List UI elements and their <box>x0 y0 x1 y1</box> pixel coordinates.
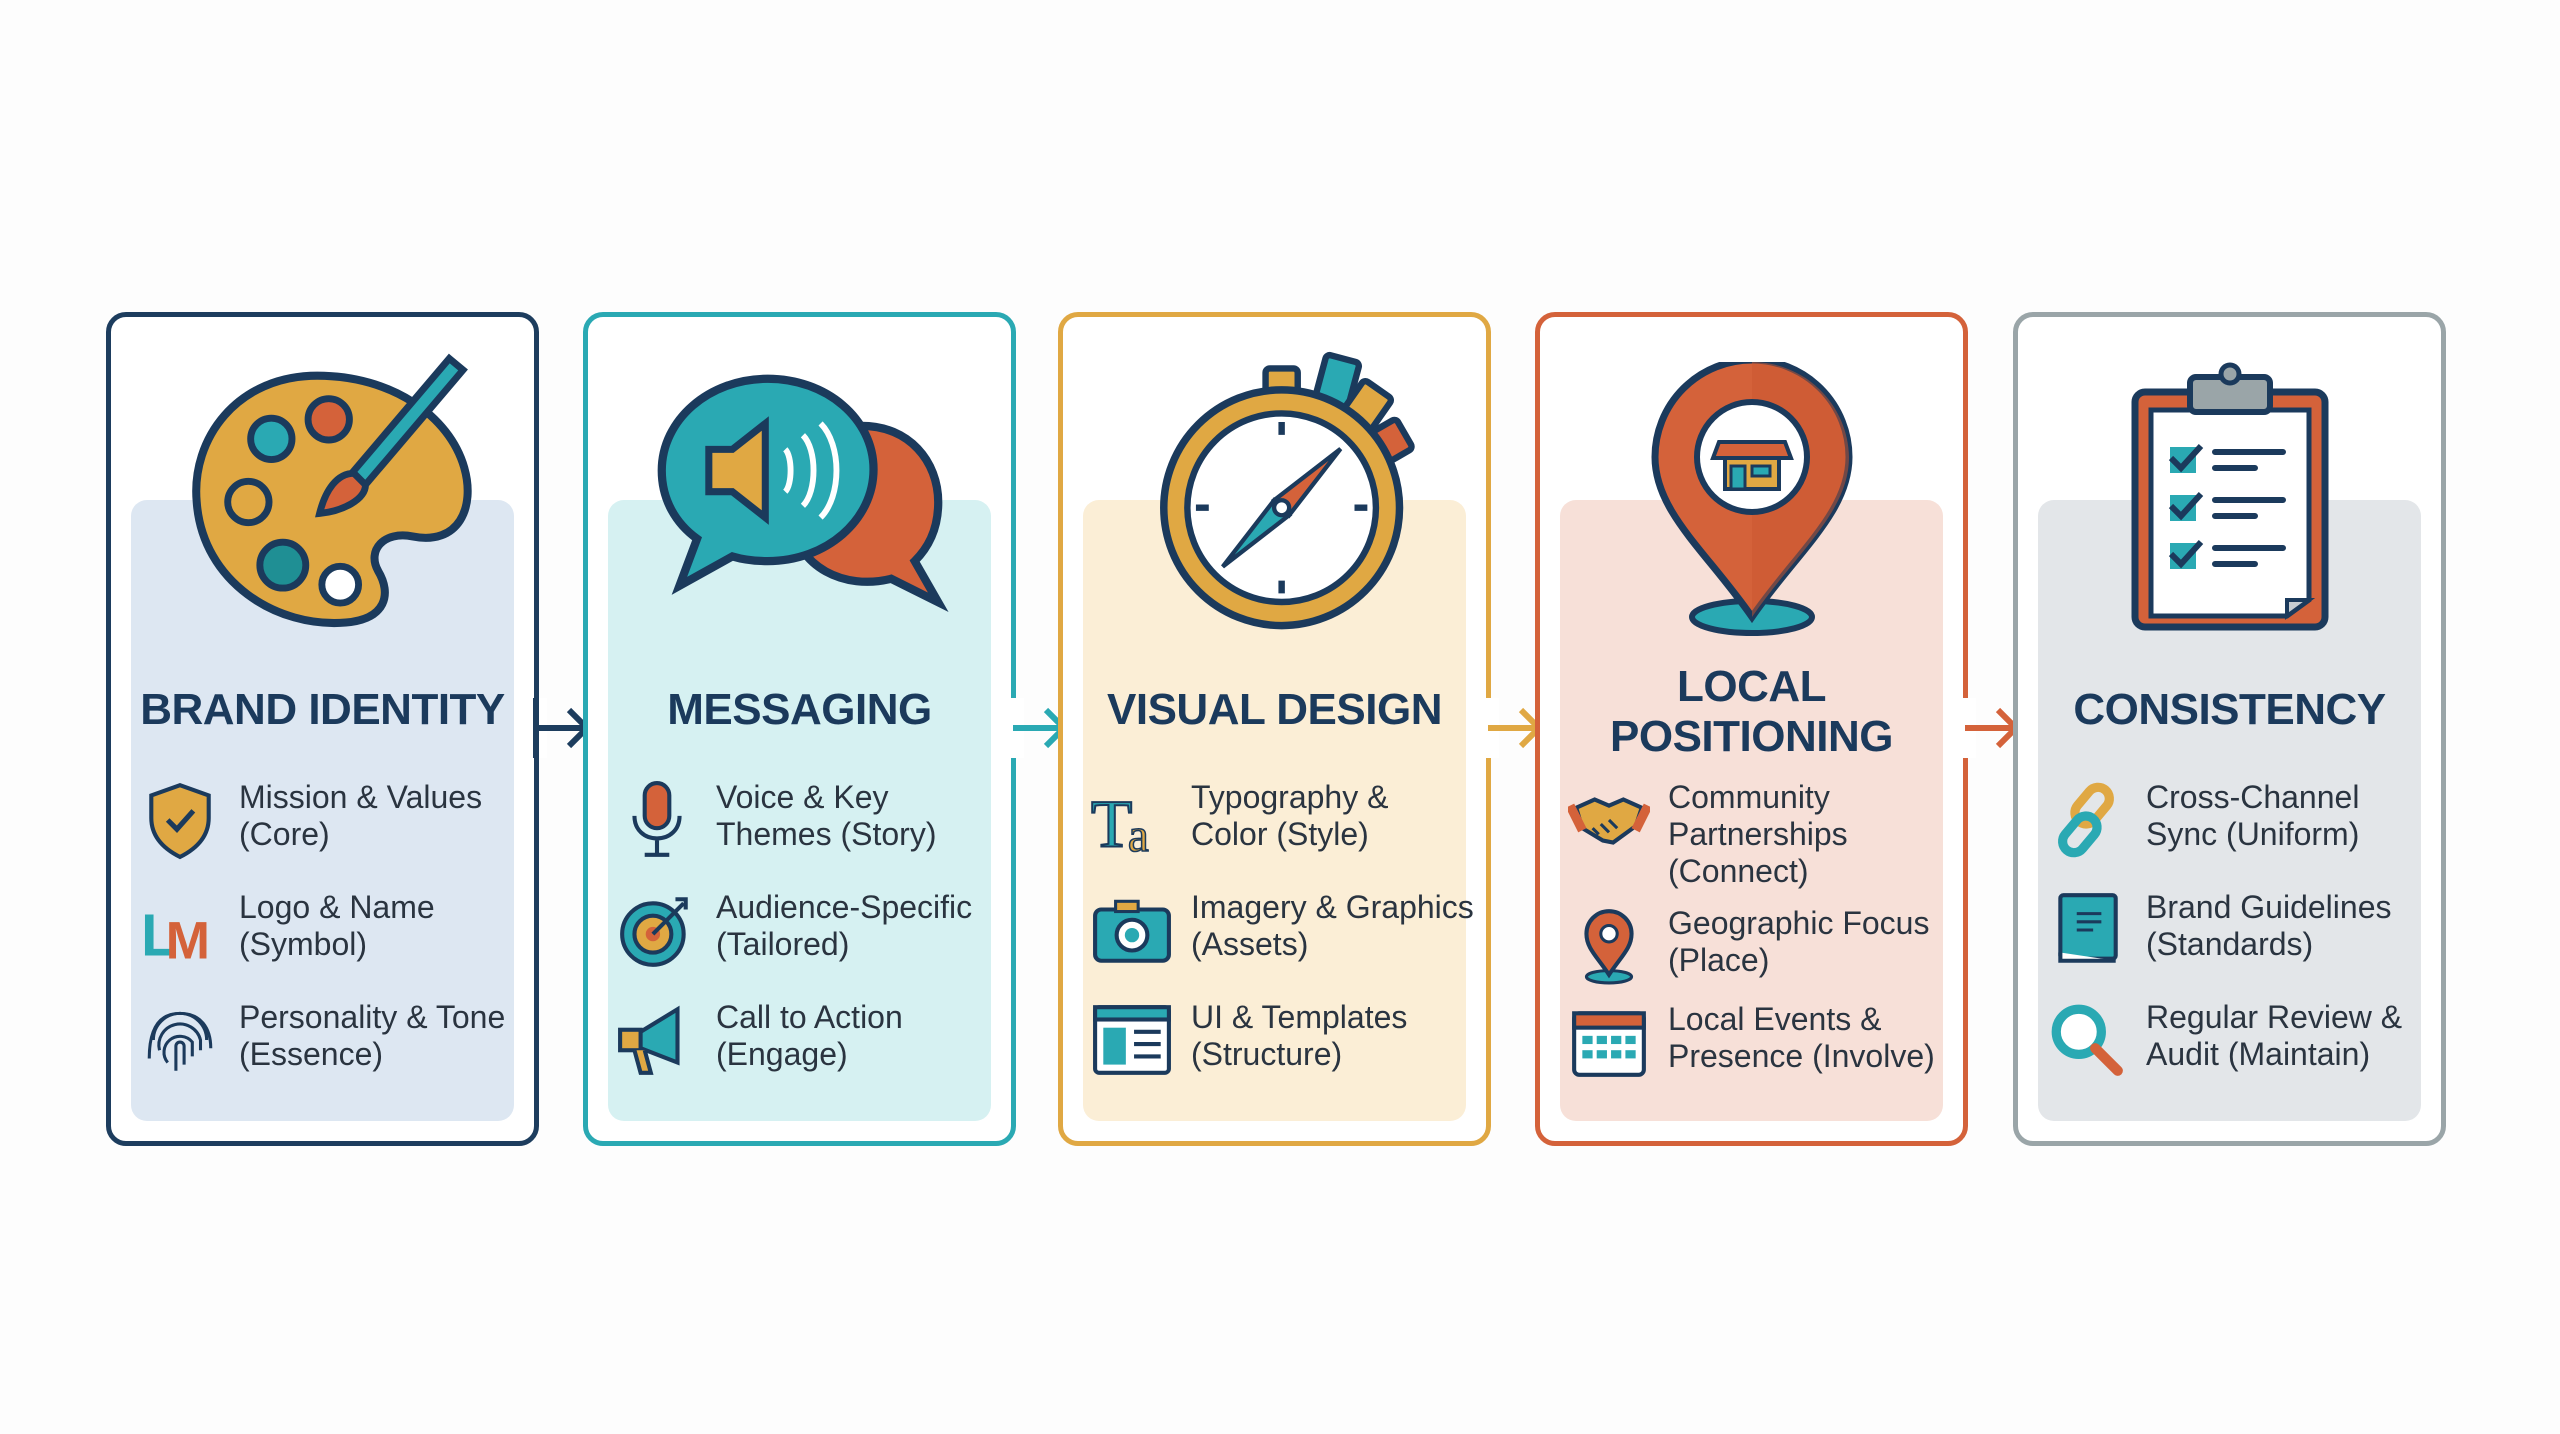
item: personality & tone <box>148 999 505 1072</box>
item: typography & color <box>1091 779 1388 861</box>
panel: messaging <box>583 312 1016 1146</box>
heading: local positioning <box>1610 662 1893 761</box>
item: call to action: (Engage) <box>716 1036 848 1072</box>
item: audience-specific: Audience-Specific <box>716 889 972 925</box>
item: cross-channel sync: Sync (Uniform) <box>2146 816 2359 852</box>
panel: consistency <box>2013 312 2446 1146</box>
item: logo & name: M <box>166 912 210 971</box>
item: voice & key themes: Voice & Key <box>716 779 889 815</box>
icon: map pin with store <box>1652 362 1852 636</box>
item: regular review <box>2052 999 2402 1076</box>
item: geographic focus <box>1584 905 1929 984</box>
item: typography & color: T <box>1091 787 1132 861</box>
arrow: 4 to 5 <box>1963 698 2013 758</box>
item: regular review: Regular Review & <box>2146 999 2402 1035</box>
item: logo & name: L <box>141 902 177 969</box>
arrow: 2 to 3 <box>1011 698 1058 758</box>
heading: visual design: VISUAL DESIGN <box>1107 685 1442 734</box>
heading: local positioning: LOCAL <box>1677 662 1826 711</box>
item: typography & color: Color (Style) <box>1191 816 1369 852</box>
item: ui & templates <box>1093 999 1407 1075</box>
heading: local positioning: POSITIONING <box>1610 712 1893 761</box>
item: brand guidelines: (Standards) <box>2146 926 2313 962</box>
arrow: 1 to 2 <box>533 698 583 758</box>
heading: consistency: CONSISTENCY <box>2073 685 2386 734</box>
panel: visual design <box>1058 312 1491 1146</box>
item: imagery & graphics <box>1093 889 1474 963</box>
item: imagery & graphics: Imagery & Graphics <box>1191 889 1474 925</box>
item: ui & templates: (Structure) <box>1191 1036 1342 1072</box>
item: local events: Presence (Involve) <box>1668 1038 1935 1074</box>
arrow: 3 to 4 <box>1486 698 1535 758</box>
item: community partnerships <box>1568 779 1848 889</box>
item: imagery & graphics: (Assets) <box>1191 926 1308 962</box>
item: logo & name: (Symbol) <box>239 926 367 962</box>
item: mission & values <box>149 779 482 860</box>
item: call to action: Call to Action <box>716 999 903 1035</box>
icon: speech bubbles <box>658 374 948 612</box>
item: community partnerships: Community <box>1668 779 1830 815</box>
item: community partnerships: Partnerships <box>1668 816 1848 852</box>
item: voice & key themes: Themes (Story) <box>716 816 936 852</box>
item: regular review: Audit (Maintain) <box>2146 1036 2370 1072</box>
item: audience-specific <box>620 889 972 967</box>
item: audience-specific: (Tailored) <box>716 926 849 962</box>
item: geographic focus: (Place) <box>1668 942 1769 978</box>
item: voice & key themes <box>632 779 936 857</box>
item: typography & color: a <box>1128 810 1149 861</box>
item: brand guidelines <box>2058 889 2391 963</box>
item: ui & templates: UI & Templates <box>1191 999 1407 1035</box>
item: logo & name <box>141 889 435 971</box>
item: geographic focus: Geographic Focus <box>1668 905 1929 941</box>
heading: messaging: MESSAGING <box>667 685 932 734</box>
panel: local positioning <box>1535 312 1968 1146</box>
icon: clipboard checklist <box>2132 362 2328 630</box>
item: cross-channel sync <box>2058 779 2359 858</box>
item: local events <box>1572 1001 1935 1077</box>
item: call to action <box>618 999 903 1075</box>
item: mission & values: (Core) <box>239 816 330 852</box>
item: cross-channel sync: Cross-Channel <box>2146 779 2359 815</box>
icon: compass with swatches <box>1160 352 1415 630</box>
item: local events: Local Events & <box>1668 1001 1881 1037</box>
panel: brand identity <box>106 312 539 1146</box>
icon: palette <box>192 354 472 628</box>
item: logo & name: Logo & Name <box>239 889 435 925</box>
item: personality & tone: (Essence) <box>239 1036 383 1072</box>
item: personality & tone: Personality & Tone <box>239 999 505 1035</box>
item: community partnerships: (Connect) <box>1668 853 1808 889</box>
item: typography & color: Typography & <box>1191 779 1388 815</box>
heading: brand identity: BRAND IDENTITY <box>140 685 505 734</box>
item: mission & values: Mission & Values <box>239 779 482 815</box>
item: brand guidelines: Brand Guidelines <box>2146 889 2391 925</box>
